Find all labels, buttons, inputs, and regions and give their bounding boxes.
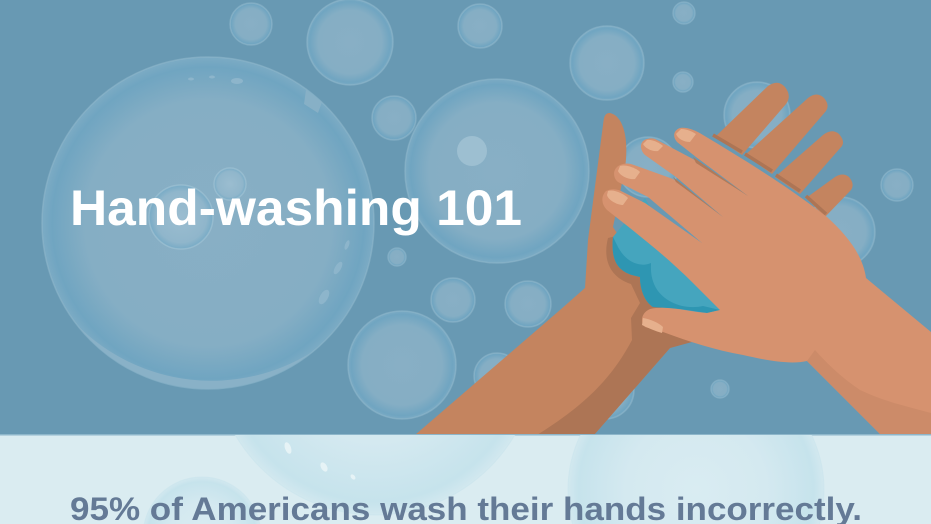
forearm shade — [807, 350, 931, 435]
fingernails — [607, 129, 696, 333]
lower panel — [0, 434, 931, 524]
back hand shadow — [537, 235, 692, 435]
soap bubbles — [42, 0, 913, 419]
soap bar — [613, 198, 720, 313]
slits between fingers — [673, 157, 748, 217]
illustration: washing hands with soap — [415, 83, 931, 435]
back hand and forearm — [415, 113, 690, 435]
finger shadow on back hand — [713, 135, 826, 214]
lower panel bubbles — [144, 435, 824, 524]
front hand and forearm — [602, 128, 931, 435]
back hand fingers — [715, 83, 853, 217]
title: Hand-washing 101 — [70, 180, 522, 236]
soap shadow — [613, 237, 720, 313]
